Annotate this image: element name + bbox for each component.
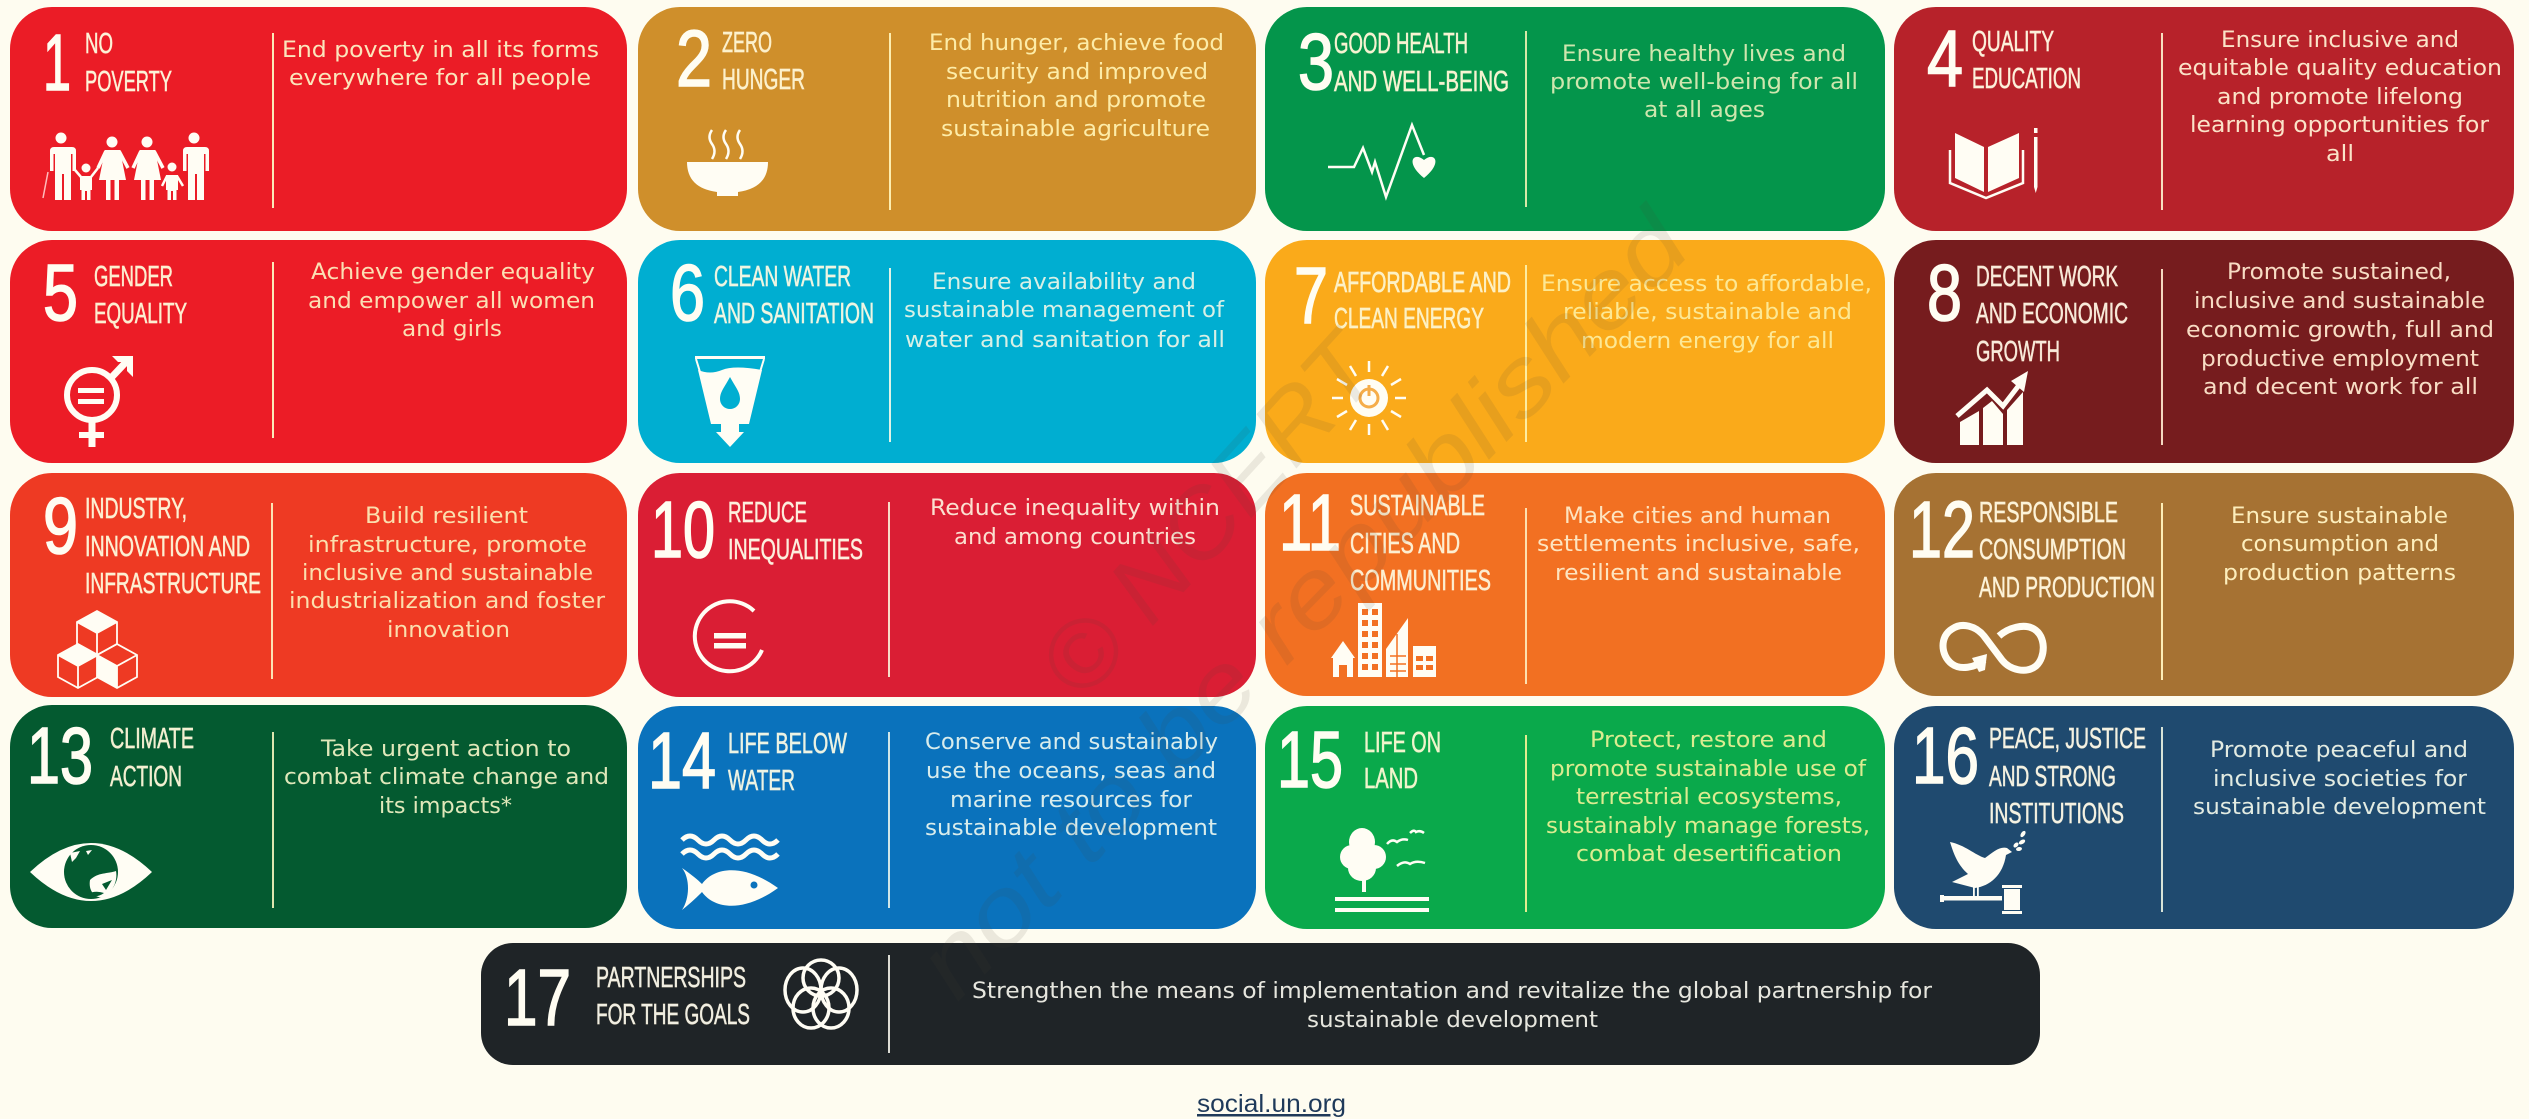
- description: modern energy for all: [1581, 329, 1834, 354]
- description: and empower all women: [308, 289, 595, 314]
- title: climate action: [110, 723, 194, 793]
- icon: dove and gavel: [1940, 830, 2027, 914]
- icon: tree and birds: [1335, 828, 1429, 912]
- number 8: 8: [1927, 248, 1962, 337]
- title: life below water: LIFE BELOW: [728, 728, 847, 760]
- description: reliable, sustainable and: [1563, 300, 1852, 325]
- title: gender equality: GENDER: [94, 261, 173, 293]
- title: quality education: QUALITY: [1972, 26, 2054, 58]
- number 11: 11: [1279, 478, 1341, 567]
- icon: stacked cubes: [58, 611, 137, 688]
- title: responsible consumption and production: CONSUMPTION: [1979, 534, 2126, 566]
- panel: goal 17 partnerships: [481, 943, 2040, 1065]
- description: settlements inclusive, safe,: [1537, 532, 1860, 557]
- number 14: 14: [648, 716, 716, 805]
- number 6: 6: [670, 248, 705, 337]
- description: its impacts*: [379, 794, 512, 819]
- description: promote well-being for all: [1550, 70, 1858, 95]
- description: [1550, 42, 1858, 123]
- title: climate action: ACTION: [110, 761, 182, 793]
- panel: goal 10 reduce inequalities: [638, 473, 1256, 697]
- title: peace, justice and strong institutions: PEACE, JUSTICE: [1989, 723, 2146, 755]
- description: [930, 496, 1220, 550]
- description: inclusive and sustainable: [302, 561, 593, 586]
- description: End hunger, achieve food: [929, 31, 1224, 56]
- icon: water glass: [695, 356, 765, 447]
- title: peace, justice and strong institutions: AND STRONG: [1989, 761, 2116, 793]
- title: no poverty: POVERTY: [85, 66, 172, 98]
- title: clean water and sanitation: [714, 261, 874, 330]
- description: sustainable management of: [904, 298, 1225, 323]
- description: Promote sustained,: [2227, 260, 2451, 285]
- title: sustainable cities and communities: [1350, 490, 1491, 597]
- description: [284, 737, 609, 819]
- title: life on land: LIFE ON: [1364, 727, 1441, 759]
- description: [925, 730, 1218, 841]
- description: economic growth, full and: [2186, 318, 2494, 343]
- description: Make cities and human: [1564, 504, 1831, 529]
- title: gender equality: EQUALITY: [94, 298, 187, 330]
- icon: waves and fish: [682, 836, 778, 910]
- panel: goal 9 industry: [10, 473, 627, 697]
- description: Ensure sustainable: [2231, 504, 2448, 529]
- description: Conserve and sustainably: [925, 730, 1218, 755]
- source link text: social.un.org: [1197, 1090, 1346, 1118]
- icon: interlocking rings: [785, 960, 857, 1028]
- title: gender equality: [94, 261, 187, 330]
- description: promote sustainable use of: [1550, 757, 1867, 782]
- description: Ensure availability and: [932, 270, 1196, 295]
- description: [1537, 504, 1860, 586]
- title: life below water: WATER: [728, 765, 795, 797]
- panel: goal 11 sustainable cities: [1265, 473, 1885, 696]
- description: [2223, 504, 2456, 586]
- number 7: 7: [1294, 251, 1328, 340]
- description: security and improved: [946, 60, 1208, 85]
- title: life below water: [728, 728, 847, 797]
- description: Ensure inclusive and: [2221, 28, 2459, 53]
- title: sustainable cities and communities: SUSTAINABLE: [1350, 490, 1485, 522]
- icon: eye with globe: [30, 843, 152, 901]
- title: reduce inequalities: REDUCE: [728, 497, 807, 529]
- icon: book and pencil: [1950, 128, 2038, 198]
- panel: goal 12 responsible consumption: [1894, 473, 2514, 696]
- description: inclusive societies for: [2213, 767, 2468, 792]
- description: Promote peaceful and: [2210, 738, 2468, 763]
- description: sustainable development: [1307, 1008, 1598, 1033]
- description: Protect, restore and: [1590, 728, 1827, 753]
- icon: rising chart: [1957, 371, 2028, 445]
- description: innovation: [387, 618, 510, 643]
- number 2: 2: [676, 14, 712, 103]
- icon: bowl: [687, 130, 768, 196]
- icon: heartbeat: [1328, 125, 1435, 197]
- panel: goal 16 peace and justice: [1894, 706, 2514, 929]
- number 5: 5: [43, 248, 78, 337]
- icon: family: [43, 132, 209, 200]
- title: partnerships for the goals: PARTNERSHIPS: [596, 962, 746, 994]
- description: and decent work for all: [2203, 375, 2478, 400]
- description: [2178, 28, 2502, 167]
- title: decent work and economic growth: DECENT WORK: [1976, 261, 2118, 293]
- title: clean water and sanitation: AND SANITATION: [714, 298, 874, 330]
- title: affordable and clean energy: CLEAN ENERGY: [1334, 303, 1484, 335]
- number 17: 17: [504, 953, 571, 1042]
- description: [289, 504, 606, 643]
- description: production patterns: [2223, 561, 2456, 586]
- description: [308, 260, 595, 342]
- description: [282, 38, 599, 91]
- number 15: 15: [1277, 715, 1343, 804]
- description: [2193, 738, 2486, 820]
- watermark: not to be republished: [896, 188, 1711, 1018]
- panel: goal 1 no poverty: [10, 7, 627, 231]
- description: sustainable development: [2193, 795, 2486, 820]
- description: terrestrial ecosystems,: [1576, 785, 1842, 810]
- number 13: 13: [27, 711, 93, 800]
- description: use the oceans, seas and: [926, 759, 1216, 784]
- title: clean water and sanitation: CLEAN WATER: [714, 261, 851, 293]
- panel: goal 2 zero hunger: [638, 7, 1256, 231]
- icon: sun with power symbol: [1332, 361, 1406, 435]
- description: and girls: [402, 317, 502, 342]
- number 9: 9: [43, 481, 78, 570]
- panel: goal 4 quality education: [1894, 7, 2514, 231]
- title: industry, innovation and infrastructure: INFRASTRUCTURE: [85, 568, 261, 600]
- icon: equality circle: [695, 601, 762, 671]
- title: partnerships for the goals: FOR THE GOALS: [596, 999, 750, 1031]
- description: sustainably manage forests,: [1546, 814, 1870, 839]
- number 10: 10: [651, 485, 715, 574]
- panel: goal 5 gender equality: [10, 240, 627, 463]
- title: peace, justice and strong institutions: INSTITUTIONS: [1989, 798, 2124, 830]
- title: responsible consumption and production: [1979, 497, 2155, 604]
- description: nutrition and promote: [946, 88, 1206, 113]
- description: inclusive and sustainable: [2194, 289, 2485, 314]
- watermark: © NCERT: [1018, 310, 1404, 718]
- number 16: 16: [1912, 711, 1979, 800]
- title: affordable and clean energy: AFFORDABLE AND: [1334, 267, 1511, 299]
- description: [1546, 728, 1870, 867]
- description: [1541, 272, 1872, 354]
- description: resilient and sustainable: [1555, 561, 1842, 586]
- title: zero hunger: ZERO: [722, 27, 772, 59]
- panel: goal 8 decent work: [1894, 240, 2514, 463]
- description: sustainable agriculture: [941, 117, 1210, 142]
- icon: gender symbol: [67, 356, 133, 447]
- panel: goal 14 life below water: [638, 706, 1256, 929]
- title: life on land: [1364, 727, 1441, 795]
- description: combat climate change and: [284, 765, 609, 790]
- title: quality education: EDUCATION: [1972, 63, 2081, 95]
- title: responsible consumption and production: AND PRODUCTION: [1979, 572, 2155, 604]
- description: Ensure access to affordable,: [1541, 272, 1872, 297]
- title: no poverty: NO: [85, 28, 113, 60]
- number 12: 12: [1909, 485, 1975, 574]
- title: life on land: LAND: [1364, 763, 1418, 795]
- description: Achieve gender equality: [311, 260, 595, 285]
- title: industry, innovation and infrastructure: [85, 493, 261, 600]
- description: equitable quality education: [2178, 56, 2502, 81]
- title: zero hunger: HUNGER: [722, 64, 805, 96]
- description: marine resources for: [950, 788, 1193, 813]
- title: decent work and economic growth: AND ECONOMIC: [1976, 298, 2128, 330]
- description: sustainable development: [925, 816, 1217, 841]
- description: learning opportunities for: [2190, 113, 2490, 138]
- description: combat desertification: [1576, 842, 1842, 867]
- description: [2186, 260, 2494, 400]
- description: at all ages: [1644, 98, 1765, 123]
- description: [972, 979, 1933, 1033]
- title: responsible consumption and production: RESPONSIBLE: [1979, 497, 2118, 529]
- title: sustainable cities and communities: CITIES AND: [1350, 528, 1460, 560]
- description: everywhere for all people: [289, 66, 591, 91]
- number 4: 4: [1927, 14, 1963, 103]
- number 3: 3: [1298, 17, 1334, 106]
- title: climate action: CLIMATE: [110, 723, 194, 755]
- title: no poverty: [85, 28, 172, 98]
- description: water and sanitation for all: [905, 328, 1225, 353]
- description: infrastructure, promote: [308, 533, 587, 558]
- description: and promote lifelong: [2217, 85, 2463, 110]
- panel: goal 7 affordable energy: [1265, 240, 1885, 463]
- icon: infinity loop: [1943, 625, 2043, 672]
- title: reduce inequalities: INEQUALITIES: [728, 534, 863, 566]
- description: Take urgent action to: [320, 737, 571, 762]
- title: quality education: [1972, 26, 2081, 95]
- icon: city buildings: [1331, 603, 1436, 677]
- panel: goal 13 climate action: [10, 705, 627, 928]
- title: good health and well-being: [1334, 28, 1509, 98]
- title: affordable and clean energy: [1334, 267, 1511, 335]
- panel: goal 3 good health: [1265, 7, 1885, 231]
- title: partnerships for the goals: [596, 962, 750, 1031]
- description: consumption and: [2241, 532, 2439, 557]
- description: Ensure healthy lives and: [1562, 42, 1846, 67]
- description: productive employment: [2201, 347, 2479, 372]
- title: sustainable cities and communities: COMMUNITIES: [1350, 565, 1491, 597]
- title: decent work and economic growth: [1976, 261, 2128, 368]
- description: all: [2326, 142, 2354, 167]
- title: decent work and economic growth: GROWTH: [1976, 336, 2060, 368]
- title: peace, justice and strong institutions: [1989, 723, 2146, 830]
- title: good health and well-being: AND WELL-BEING: [1334, 66, 1509, 98]
- description: Build resilient: [365, 504, 528, 529]
- number 1: 1: [43, 18, 71, 107]
- panel: goal 15 life on land: [1265, 706, 1885, 929]
- title: good health and well-being: GOOD HEALTH: [1334, 28, 1468, 60]
- description: [929, 31, 1224, 142]
- description: End poverty in all its forms: [282, 38, 599, 63]
- description: Reduce inequality within: [930, 496, 1220, 521]
- title: industry, innovation and infrastructure: INDUSTRY,: [85, 493, 187, 525]
- title: zero hunger: [722, 27, 805, 96]
- description: and among countries: [954, 525, 1196, 550]
- title: reduce inequalities: [728, 497, 863, 566]
- description: Strengthen the means of implementation and revitalize the global partnership for: [972, 979, 1933, 1004]
- description: industrialization and foster: [289, 589, 606, 614]
- title: industry, innovation and infrastructure: INNOVATION AND: [85, 531, 250, 563]
- description: [904, 270, 1225, 353]
- panel: goal 6 clean water: [638, 240, 1256, 463]
